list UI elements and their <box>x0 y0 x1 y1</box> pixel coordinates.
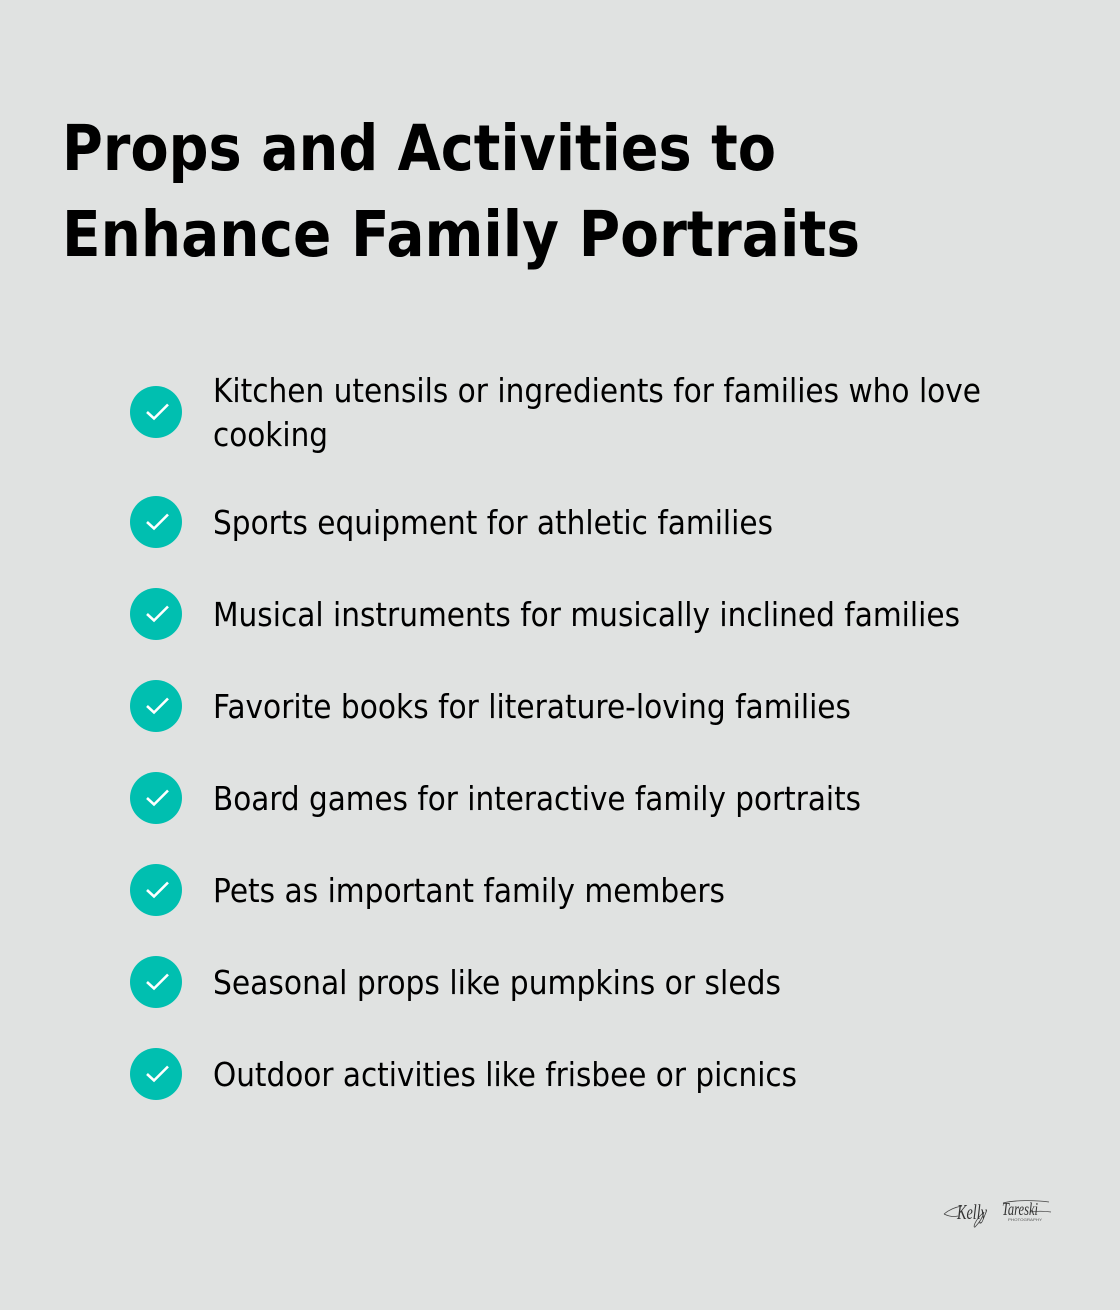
logo: signature: PHOTOGRAPHY <box>1008 1218 1043 1222</box>
item: musical instruments <box>130 588 960 640</box>
item: musical instruments: Musical instruments for musically inclined families <box>213 595 960 634</box>
logo: signature <box>944 1199 1051 1227</box>
title <box>62 112 860 271</box>
item: sports equipment <box>130 496 773 548</box>
item: seasonal props: Seasonal props like pumpkins or sleds <box>213 963 781 1002</box>
item: pets: Pets as important family members <box>213 871 725 910</box>
title: Enhance Family Portraits <box>62 198 860 271</box>
item: board games <box>130 772 861 824</box>
item: seasonal props <box>130 956 781 1008</box>
item: outdoor activities: Outdoor activities like frisbee or picnics <box>213 1055 797 1094</box>
item: outdoor activities <box>130 1048 797 1100</box>
item: pets <box>130 864 725 916</box>
logo: signature: Kelly <box>956 1200 987 1224</box>
item: kitchen utensils: Kitchen utensils or ingredients for families who love <box>213 371 981 410</box>
item: kitchen utensils <box>130 371 981 454</box>
item: favorite books: Favorite books for literature-loving families <box>213 687 851 726</box>
item: board games: Board games for interactive family portraits <box>213 779 861 818</box>
item: kitchen utensils: cooking <box>213 415 328 454</box>
item: sports equipment: Sports equipment for athletic families <box>213 503 773 542</box>
title: Props and Activities to <box>62 112 776 185</box>
item: favorite books <box>130 680 851 732</box>
checklist <box>130 371 981 1100</box>
logo: signature: Tareski <box>1002 1199 1038 1219</box>
